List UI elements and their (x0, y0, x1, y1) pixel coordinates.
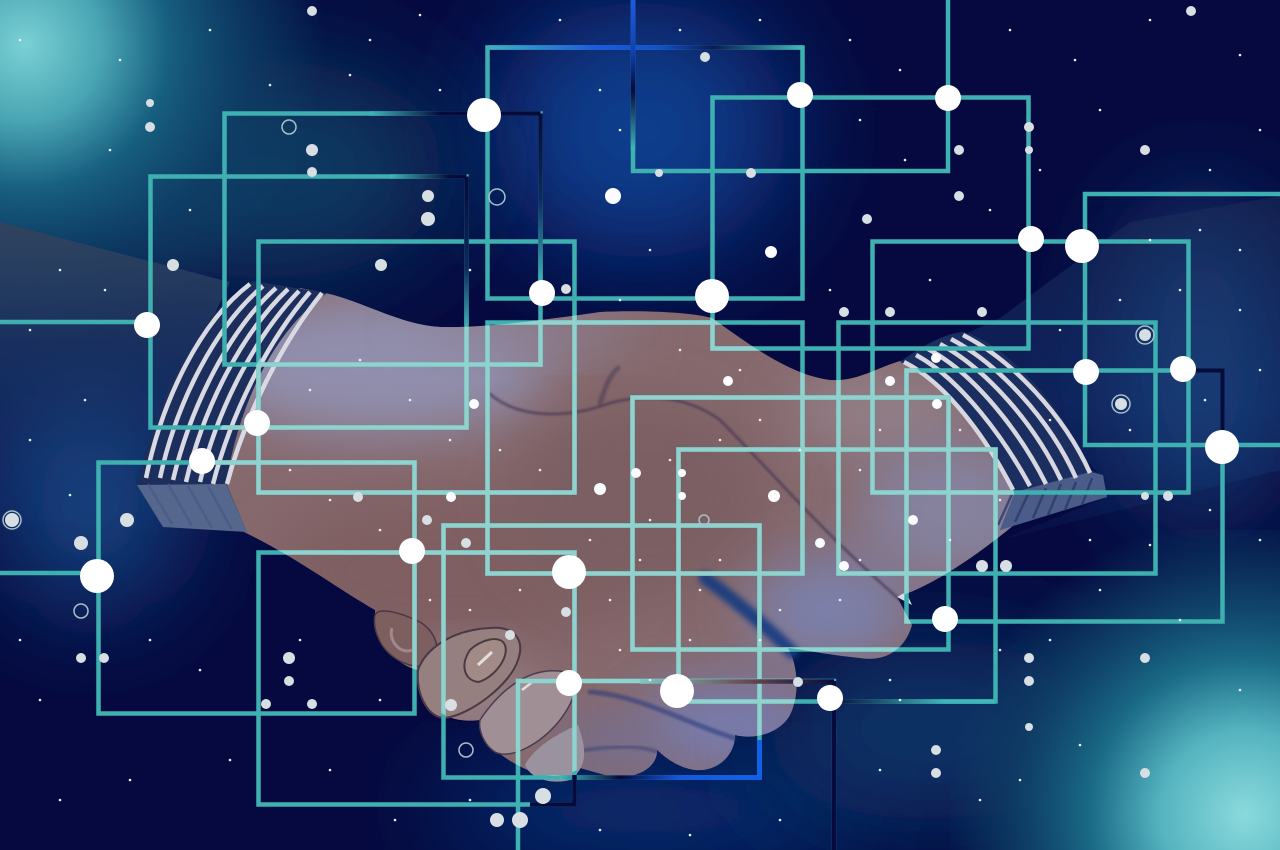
network frames lightened over the hands (214, 315, 1014, 776)
right hand fingertip shadow (897, 592, 912, 605)
fingers (374, 611, 584, 782)
left cuff (137, 281, 327, 532)
white nodes on hands (446, 188, 942, 571)
left forearm silhouette (0, 222, 230, 530)
right forearm silhouette (963, 196, 1280, 540)
line colour accents (370, 0, 1222, 850)
right cuff (900, 332, 1107, 530)
finger creases and shadows (490, 368, 900, 752)
clasped hands (226, 288, 1014, 776)
large network nodes (80, 82, 1239, 711)
ringed nodes (3, 120, 1154, 757)
handshake (137, 280, 1107, 790)
